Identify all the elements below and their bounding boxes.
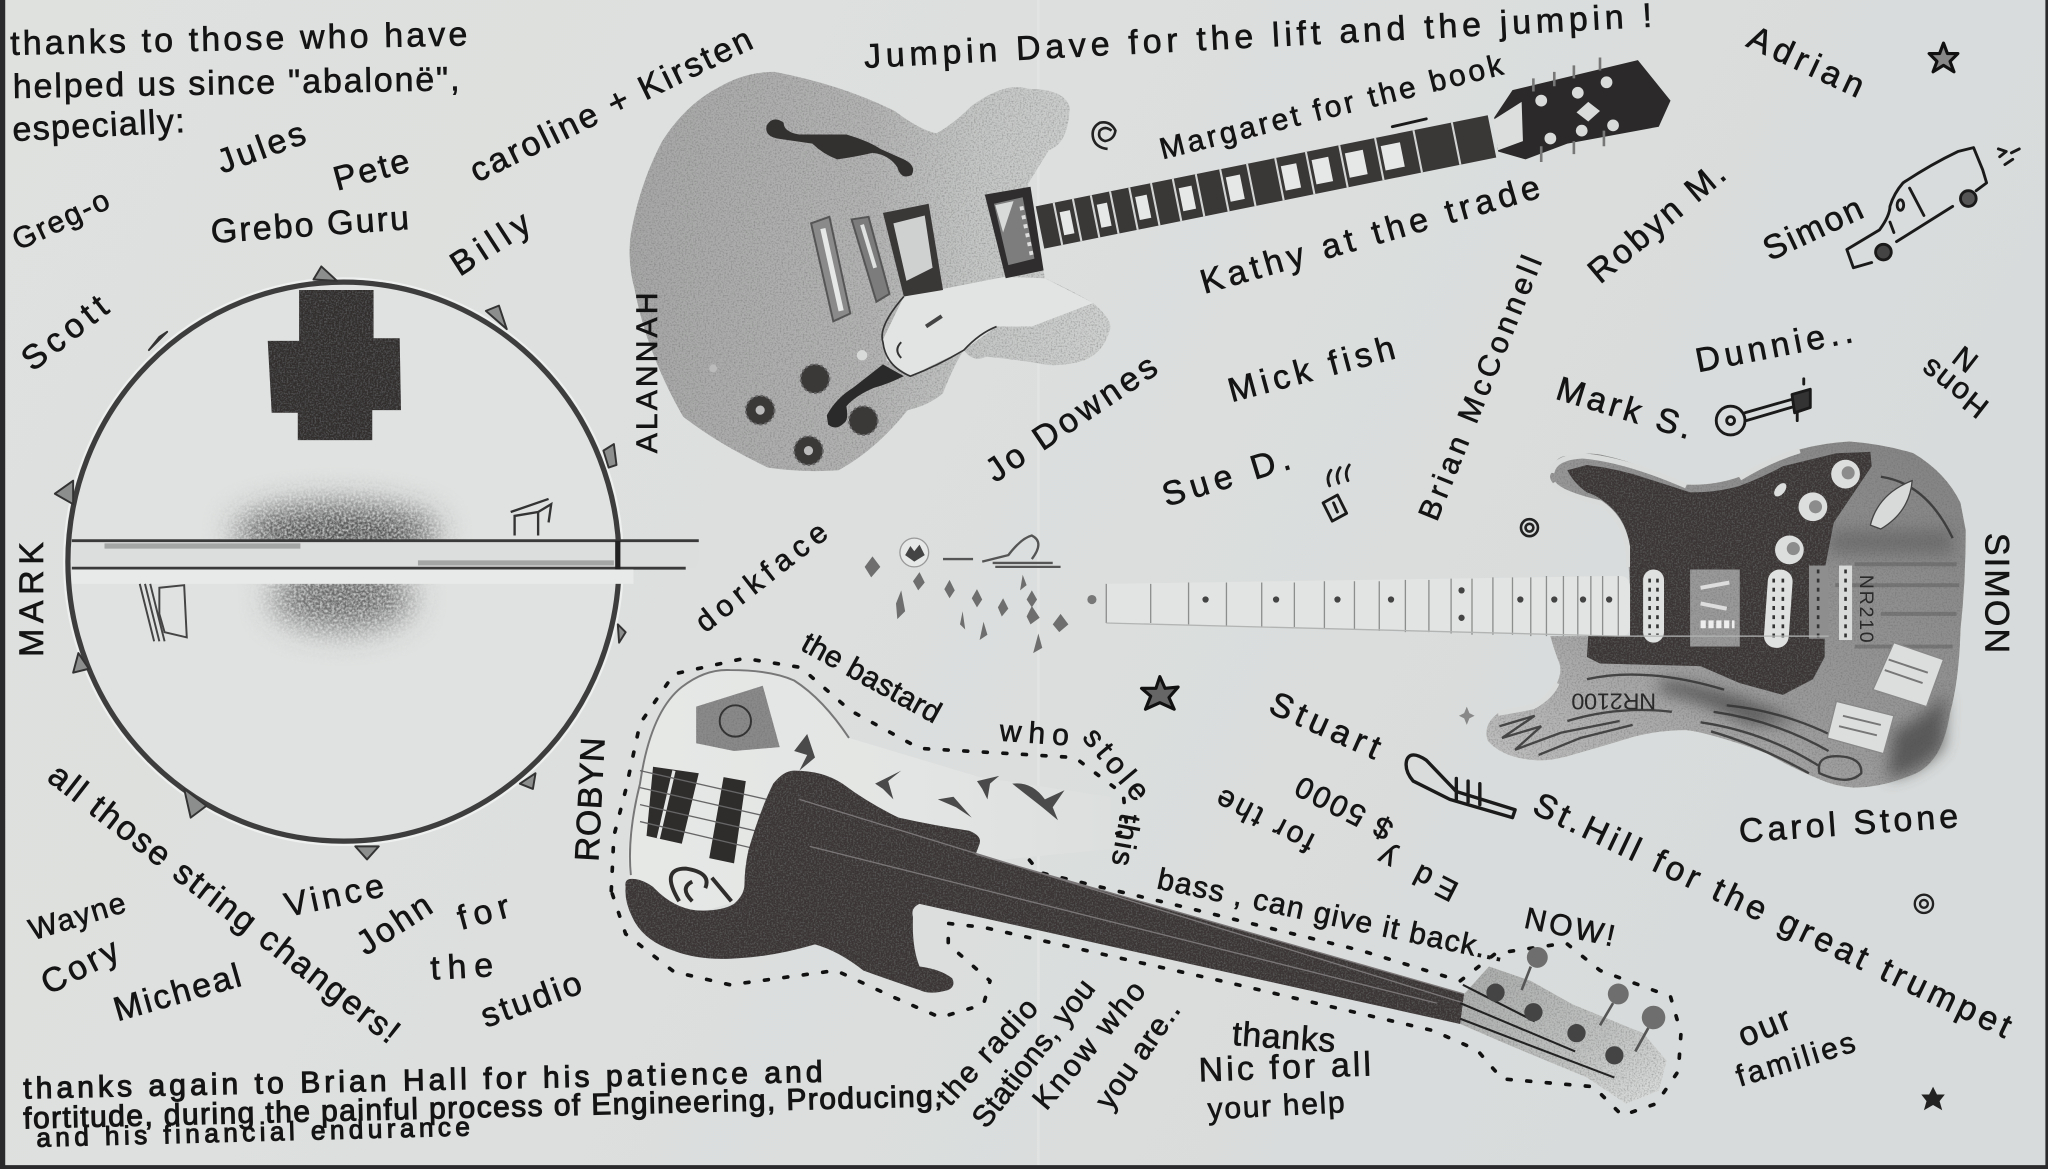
name: Dunnie.. [1692,312,1856,380]
name: Vince [281,867,387,925]
band name: ROBYN [568,737,613,862]
bass headstock [1460,967,1667,1104]
names: top centre and right [689,0,2015,653]
white scratchplate body [628,670,1110,914]
initial upside-down: N [1947,339,1984,378]
dark bass body and neck [625,771,1464,1024]
name: Scott [14,287,116,379]
paper stickers [1873,643,1944,707]
band name: MARK [13,542,51,657]
tuning pegs [1535,76,1619,144]
band name: SIMON [1977,533,2015,653]
closing note: Nic [1198,1015,1372,1126]
NR2100 body text: NR2100 [1571,689,1656,715]
closing note: Brian Hall [23,1056,943,1153]
icon: trumpet [1406,755,1515,818]
line: Nic for all [1198,1045,1372,1089]
name: Jo Downes [978,347,1164,490]
upside-down amount: $ 5000 [1290,769,1398,846]
drum shading smudges [235,504,439,630]
segment: NOW! [1521,902,1618,953]
knob centres [709,350,867,455]
dark wood smears [1660,529,1953,778]
snare drum illustration [55,266,699,859]
line: you are.. [1089,995,1187,1116]
knobs [1772,460,1860,564]
control knobs [746,364,878,465]
strat body [1486,441,1966,788]
strat neck [1106,576,1630,636]
front pickup [811,217,850,321]
name upside-down: Hons [1915,351,1995,424]
word: families [1732,1026,1859,1093]
name: Pete [329,142,413,198]
name: Sue D. [1158,440,1295,514]
name: Carol Stone [1738,797,1959,850]
icon: small grey star [1459,707,1475,725]
icon: star top right [1929,43,1958,72]
name: Greg-o [7,184,115,257]
strat pickups [1643,566,1852,649]
segment: stole [1076,721,1156,808]
drum rim [68,282,619,841]
name: Mark S. [1552,370,1697,447]
lower f-hole [827,364,904,427]
crown logo [140,584,187,641]
dashed cut-out line [611,658,1681,1115]
line 3: and his financial endurance [36,1111,470,1153]
icon: spiral lower right [1915,895,1933,913]
upside-down note: for the [1211,782,1320,859]
thanks line: St.Hill for the great trumpet [1527,785,2018,1046]
scratchplate strings [640,771,784,856]
bird marks [794,734,1064,820]
icon: coffee cup with steam [1323,465,1349,521]
guitar body [630,72,1111,471]
names: lower left [25,756,587,1051]
line: Stations, you [966,973,1102,1134]
ghost headstock marks [865,536,1068,653]
upside-down name: Ed y [1373,839,1463,907]
names: upper left cluster [7,20,758,862]
icon: spiral near strat [1521,519,1538,536]
name: Mick fish [1224,329,1399,410]
icon: small guitar [1716,379,1810,435]
name: Billy [443,204,538,284]
word: the [429,946,494,988]
black cross tape [268,290,401,440]
name: Grebo Guru [209,199,410,251]
band name: ALANNAH [631,293,664,453]
neck highlight lines [799,799,1464,1003]
NR210 sticker text: NR210 [1855,575,1877,643]
headstock strings [1460,985,1614,1078]
thanks line: all those string changers! [41,756,407,1051]
segment: who [998,715,1070,752]
icon: star centre [1142,677,1178,709]
name: Adrian [1742,19,1870,105]
name: Wayne [25,887,130,947]
stratocaster style guitar [865,441,1966,788]
name: dorkface [689,516,834,639]
message following bass outline [796,626,1618,969]
middle pickup [852,217,889,302]
line 1: thanks again to Brian Hall for his patience and [23,1056,823,1105]
line: your help [1207,1086,1345,1126]
drum head [68,282,619,841]
segment: the bastard [796,626,947,730]
word: studio [476,964,587,1035]
line: Know who [1026,975,1152,1116]
icon: hand-drawn car [1847,148,2019,268]
headstock [1494,60,1671,159]
name: caroline + Kirsten [464,20,758,190]
name: Simon [1757,189,1869,268]
line 2: fortitude, during the painful process of Engineering, Producing, [23,1080,943,1135]
drum stick [72,541,699,568]
wood grain [1499,477,1953,780]
centre fold [1037,0,1040,1169]
line: the radio [930,992,1045,1112]
name: Cory [35,931,125,1002]
drum lugs [55,266,626,859]
names: lower right [1211,684,2018,1093]
bass guitar with dashed cut-out outline [611,658,1681,1115]
humbucker frame [883,204,943,296]
black pickguard [1567,452,1872,695]
name: Stuart [1264,684,1387,767]
feather sketch [1870,481,1912,529]
body edge highlight [1498,451,1800,713]
bass tuners [1486,984,1624,1064]
icon: spiral near margaret [1093,122,1115,149]
icon: star bottom right [1921,1087,1945,1110]
bass pickups [647,767,699,844]
underline [1392,119,1426,127]
name: Jules [212,114,311,181]
line: thanks [1231,1015,1337,1060]
drum hardware [616,541,620,569]
semi-hollow electric guitar [630,57,1671,471]
name: Micheal [109,957,245,1029]
shield emblem [696,686,780,751]
pickguard area [883,277,1093,376]
thanks line: Margaret for the book [1156,49,1507,166]
neck joint block [985,187,1044,278]
fretted neck [1036,115,1496,249]
word: our [1732,1000,1796,1055]
name: Robyn M. [1581,154,1733,291]
line 3: especially: [11,102,186,149]
closing note: radio stations [930,973,1187,1134]
segment: bass , can give it back... [1154,863,1508,969]
upper f-hole [766,119,913,177]
swirl decoration [671,869,731,901]
name: Brian McConnell [1413,251,1549,525]
line 2: helped us since "abalonë", [13,60,460,106]
neck position dots [1087,587,1612,621]
heading: thanks intro [10,15,468,149]
segment: this [1105,811,1146,868]
thanks line: Kathy at the trade [1196,168,1544,302]
line 1: thanks to those who have [10,15,468,63]
name: John [349,886,439,963]
small stool sketch [511,499,551,536]
word: for [453,887,514,938]
